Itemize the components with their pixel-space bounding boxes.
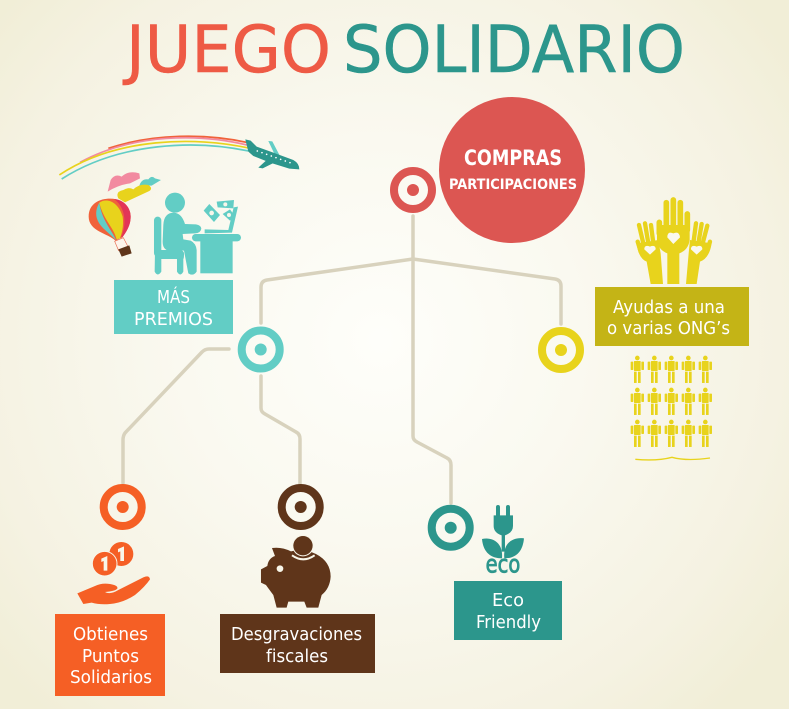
icon: hand with coins <box>77 542 150 604</box>
circle: compras participaciones: PARTICIPACIONES <box>449 177 577 193</box>
circle: compras participaciones <box>439 97 585 243</box>
box: ayudas a una o varias ONG <box>595 287 749 346</box>
icon: hot air balloon and clouds <box>89 172 161 257</box>
box: eco friendly: Friendly <box>476 612 541 633</box>
title: SOLIDARIO <box>343 13 685 88</box>
title <box>122 13 685 88</box>
icon: person at desk with laptop <box>154 193 241 275</box>
box: obtienes puntos solidarios: Puntos <box>82 646 139 667</box>
icon: eco plug and leaves <box>482 505 524 578</box>
box: ayudas a una o varias ONG: Ayudas a una <box>613 297 725 318</box>
title: JUEGO <box>122 13 331 88</box>
box: obtienes puntos solidarios: Solidarios <box>70 667 152 688</box>
target: brown <box>282 488 320 526</box>
box: desgravaciones fiscales: fiscales <box>266 646 328 667</box>
box: obtienes puntos solidarios <box>55 614 165 696</box>
target: teal <box>432 509 470 547</box>
box: ayudas a una o varias ONG: o varias ONG’s <box>607 318 730 339</box>
circle: compras participaciones: COMPRAS <box>464 146 562 170</box>
box: desgravaciones fiscales <box>220 614 375 673</box>
target: light teal <box>242 330 280 368</box>
icon: piggy bank <box>261 535 331 608</box>
box: desgravaciones fiscales: Desgravaciones <box>231 624 362 645</box>
icon: raised hands with hearts <box>637 200 712 284</box>
target: yellow <box>542 331 580 369</box>
icon: rainbow and plane <box>59 136 299 179</box>
box: mas premios: PREMIOS <box>134 309 213 330</box>
box: obtienes puntos solidarios: Obtienes <box>73 624 148 645</box>
box: mas premios <box>114 280 233 334</box>
target: red <box>394 171 432 209</box>
icon: eco plug and leaves: eco <box>486 549 520 578</box>
box: eco friendly <box>454 581 562 640</box>
box: mas premios: MÁS <box>157 286 190 308</box>
target: orange <box>104 488 142 526</box>
box: eco friendly: Eco <box>492 590 524 611</box>
connector lines <box>123 216 561 503</box>
icon: people grid <box>631 356 712 460</box>
